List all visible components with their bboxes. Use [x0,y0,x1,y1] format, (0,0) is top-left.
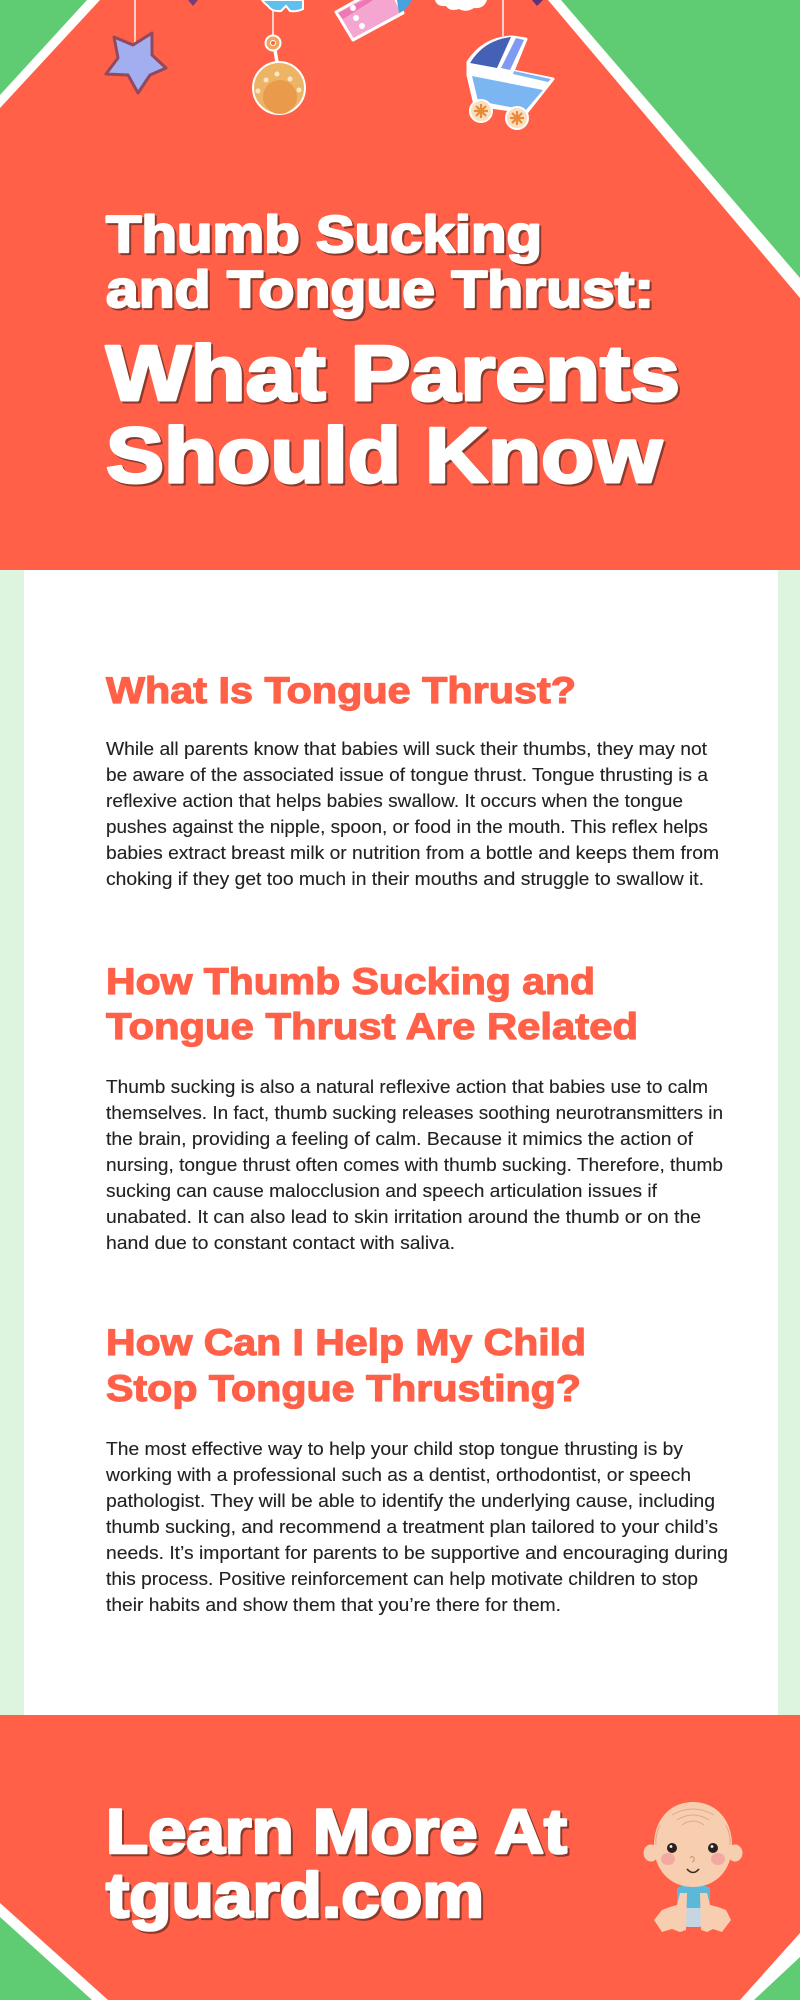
icon: baby [644,1802,742,1932]
text block: While all parents know that babies will suck their thumbs, they may not [106,738,707,759]
footer call to action: Learn More At [106,1797,567,1867]
title: Should Know [106,411,662,499]
footer call to action [106,1797,567,1931]
text block: working with a professional such as a dentist, orthodontist, or speech [105,1464,691,1485]
icon: hanging clothes fragment [262,0,303,11]
text block: needs. It’s important for parents to be supportive and encouraging during [106,1542,728,1563]
icon: star fragment at top [188,0,198,6]
heading [106,1322,586,1409]
text block: be aware of the associated issue of tongue thrust. Tongue thrusting is a [106,764,709,785]
heading [106,961,638,1047]
text block: thumb sucking, and recommend a treatment plan tailored to your child’s [106,1516,718,1537]
text block: themselves. In fact, thumb sucking releases soothing neurotransmitters in [106,1102,723,1123]
text block [106,738,719,889]
icon: baby bottle [336,0,412,40]
icon: hanging stroller [468,0,553,129]
text block: nursing, tongue thrust often comes with thumb sucking. Therefore, thumb [106,1154,723,1175]
text block: this process. Positive reinforcement can help motivate children to stop [106,1568,698,1589]
title: What Parents [106,329,680,417]
text block: choking if they get too much in their mouths and struggle to swallow it. [106,868,704,889]
section: how can I help my child [105,1322,728,1615]
heading: How Thumb Sucking and [106,961,595,1002]
text block: pushes against the nipple, spoon, or food in the mouth. This reflex helps [106,816,708,837]
section: how thumb sucking and tongue thrust are related [106,961,723,1253]
text block: The most effective way to help your child stop tongue thrusting is by [106,1438,684,1459]
text block: unabated. It can also lead to skin irritation around the thumb or on the [106,1206,701,1227]
text block [105,1438,728,1615]
right arm and leg [700,1893,731,1932]
footer call to action: tguard.com [106,1861,484,1931]
panel: footer banner [0,1715,800,2000]
icon: hanging star [106,0,166,93]
section: what is tongue thrust [106,670,719,889]
icon: cloud [435,0,487,11]
icon: star fragment right [532,0,543,6]
heading: How Can I Help My Child [106,1322,586,1363]
heading: Stop Tongue Thrusting? [106,1368,581,1409]
left arm and leg [654,1893,687,1932]
text block: pathologist. They will be able to identify the underlying cause, including [106,1490,715,1511]
panel: header banner [0,0,800,570]
page background: mint side strips [0,570,800,1715]
text block: their habits and show them that you’re there for them. [106,1594,561,1615]
text block: sucking can cause malocclusion and speech articulation issues if [106,1180,658,1201]
title: Thumb Sucking [106,206,542,264]
text block: the brain, providing a feeling of calm. Because it mimics the action of [106,1128,694,1149]
heading: Tongue Thrust Are Related [106,1006,638,1047]
panel: white content area [24,570,778,1715]
heading: What Is Tongue Thrust? [106,670,576,711]
title [106,206,680,499]
text block: babies extract breast milk or nutrition from a bottle and keeps them from [106,842,719,863]
title: and Tongue Thrust: [106,261,654,319]
text block: hand due to constant contact with saliva. [106,1232,455,1253]
text block [106,1076,723,1253]
icon: rattle toy [253,11,305,114]
text block: Thumb sucking is also a natural reflexive action that babies use to calm [106,1076,708,1097]
text block: reflexive action that helps babies swallow. It occurs when the tongue [106,790,683,811]
